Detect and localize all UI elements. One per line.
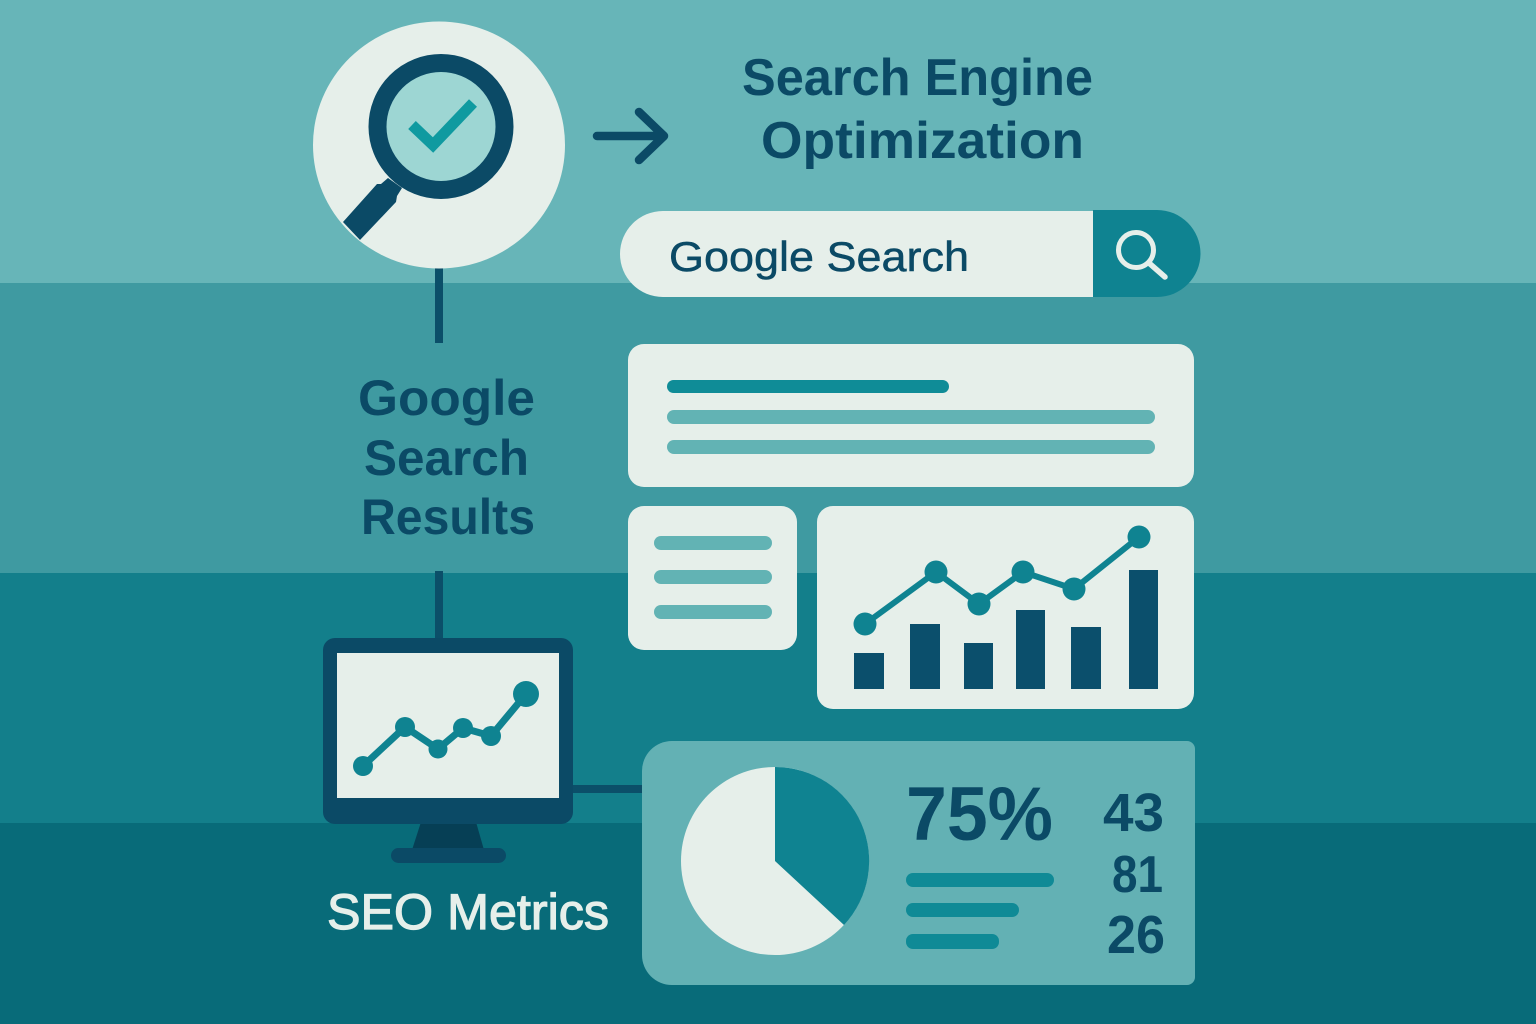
panel: small list [628, 506, 797, 650]
heading: Google Search Results: Google [358, 370, 535, 426]
metric numbers: 43 [1103, 783, 1164, 843]
icon: monitor with line chart [323, 638, 573, 863]
bars [854, 570, 1158, 689]
connector: monitor to metrics panel [570, 785, 645, 793]
metric numbers [1103, 783, 1165, 965]
connector: results label to monitor [435, 571, 443, 641]
big percentage: 75% [906, 772, 1053, 857]
line [854, 526, 1150, 636]
icon: magnifying glass with check [313, 22, 565, 268]
connector: magnifier to results label [435, 262, 443, 343]
panel: bar and line chart [817, 506, 1194, 709]
search bar text: Google Search [669, 233, 969, 280]
panel: top search result [628, 344, 1194, 487]
heading: Google Search Results: Search [364, 430, 529, 486]
legend bars [906, 873, 1054, 949]
heading: Google Search Results [358, 370, 535, 545]
panel: metrics [642, 741, 1195, 985]
pie chart [681, 767, 869, 955]
title [742, 49, 1093, 170]
metric numbers: 26 [1107, 905, 1165, 965]
title: Optimization [761, 112, 1084, 170]
search bar [620, 210, 1200, 297]
title: Search Engine [742, 49, 1093, 107]
arrow [597, 112, 664, 160]
icon: search glass [1118, 232, 1165, 277]
label: SEO Metrics: SEO Metrics [327, 884, 609, 940]
heading: Google Search Results: Results [361, 489, 535, 545]
metric numbers: 81 [1112, 846, 1163, 904]
